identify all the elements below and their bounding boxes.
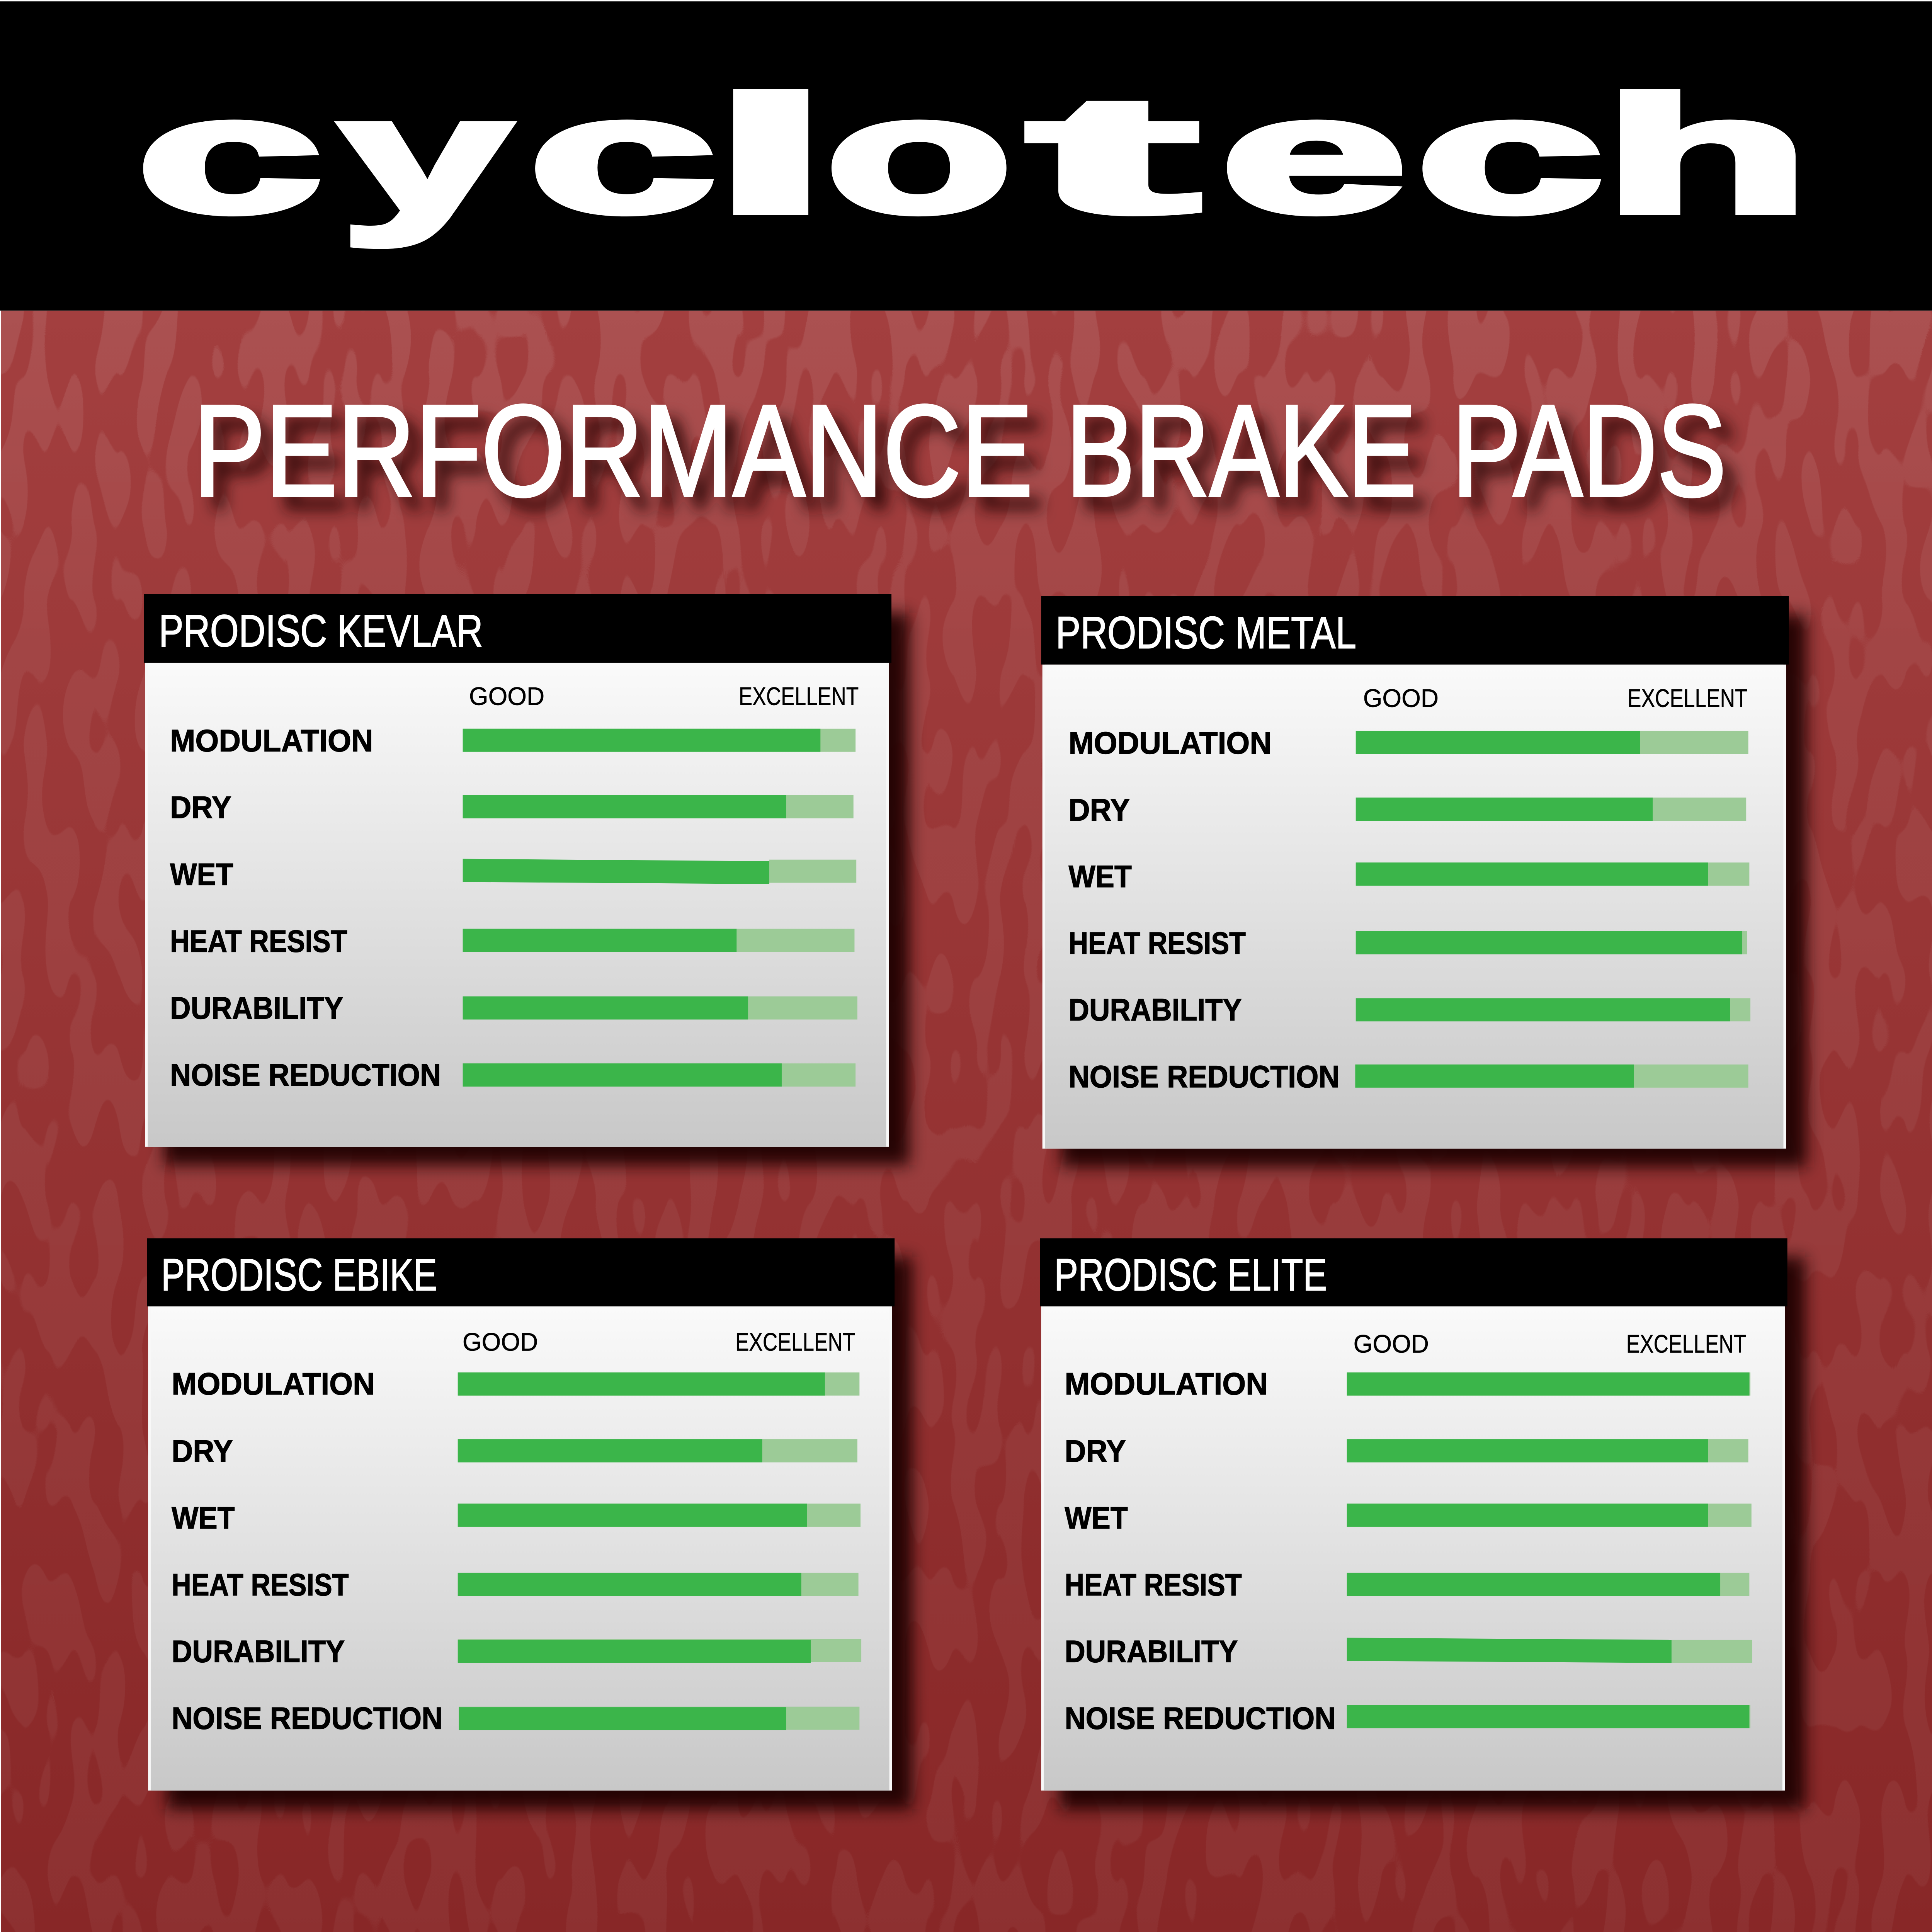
logo: cyclotech: h [1604,63,1810,247]
row: noise reduction: NOISE REDUCTION [1068,1059,1340,1094]
row: noise reduction: NOISE REDUCTION [170,1057,441,1092]
row: modulation [172,1366,859,1401]
row: noise reduction [1068,1059,1748,1094]
black logo band [0,1,1932,311]
card header [1041,596,1789,665]
row: modulation [1065,1366,1750,1401]
row: heat resist: HEAT RESIST [1065,1567,1242,1602]
panel: prodisc kevlar [144,594,909,1165]
row: dry: DRY [170,790,231,825]
row: noise reduction: NOISE REDUCTION [172,1701,442,1736]
main heading: PADS [1452,378,1726,524]
row: wet [170,857,856,892]
logo: cyclotech: y [341,63,512,247]
row: noise reduction [170,1057,855,1092]
row: heat resist: HEAT RESIST [170,923,347,959]
row: dry: DRY [1068,792,1130,827]
card header [144,594,891,663]
card header: PRODISC KEVLAR [159,605,483,656]
scale labels: EXCELLENT [739,682,859,711]
row: noise reduction [172,1701,859,1736]
row: durability: DURABILITY [172,1634,345,1669]
card body [145,663,889,1147]
row: durability [170,990,857,1025]
row: modulation: MODULATION [172,1366,375,1401]
row: modulation [170,723,855,758]
card header: PRODISC METAL [1056,607,1356,658]
scale labels [1363,684,1748,712]
panel: prodisc ebike [147,1238,912,1809]
row: durability: DURABILITY [1068,992,1242,1027]
row: modulation: MODULATION [1068,725,1272,760]
card shadow [1060,1257,1805,1809]
logo: cyclotech: o [826,63,1012,247]
row: heat resist: HEAT RESIST [172,1567,349,1602]
panel: prodisc metal [1041,596,1806,1167]
row: durability [1068,992,1750,1027]
row: modulation: MODULATION [170,723,373,758]
logo: cyclotech: c [529,63,716,246]
scale labels: EXCELLENT [1626,1330,1746,1358]
card header: PRODISC EBIKE [161,1249,437,1300]
scale labels [463,1327,855,1356]
card header [147,1238,895,1306]
scale labels: EXCELLENT [1628,684,1748,712]
row: heat resist [1065,1567,1749,1602]
card shadow [167,1257,912,1809]
row: dry [172,1434,857,1468]
card body [1043,665,1786,1149]
scale labels [1354,1330,1746,1358]
row: durability: DURABILITY [1065,1634,1238,1669]
row: wet [172,1500,861,1535]
row: heat resist: HEAT RESIST [1068,925,1246,960]
logo: cyclotech: c [1416,63,1603,246]
scale labels: EXCELLENT [735,1327,855,1356]
row: durability: DURABILITY [170,990,343,1025]
logo: cyclotech [137,63,1810,247]
main heading [193,378,1726,524]
panel: prodisc elite [1040,1238,1805,1809]
row: heat resist [1068,925,1747,960]
row: dry [1068,792,1746,827]
row: noise reduction: NOISE REDUCTION [1065,1701,1336,1736]
row: dry [1065,1434,1748,1468]
row: wet: WET [1068,859,1132,894]
row: durability [1065,1634,1752,1669]
row: noise reduction [1065,1701,1750,1736]
card shadow [1061,615,1806,1167]
row: modulation [1068,725,1748,760]
row: heat resist [170,923,854,959]
row: dry: DRY [1065,1434,1126,1468]
scale labels: GOOD [1363,684,1439,712]
scale labels: GOOD [463,1327,538,1356]
row: dry: DRY [172,1434,233,1468]
main heading: PERFORMANCE [193,378,1033,524]
card body [1041,1306,1785,1791]
row: wet: WET [1065,1500,1128,1535]
logo: cyclotech: c [137,63,322,246]
logo: cyclotech: e [1221,63,1406,247]
row: dry [170,790,854,825]
logo: cyclotech: t [1029,63,1198,246]
card header [1040,1238,1787,1306]
row: modulation: MODULATION [1065,1366,1268,1401]
row: wet [1065,1500,1752,1535]
card shadow [164,613,909,1165]
row: wet: WET [172,1500,235,1535]
scale labels [469,682,859,711]
row: heat resist [172,1567,859,1602]
main heading: BRAKE [1066,378,1417,524]
row: wet [1068,859,1749,894]
scale labels: GOOD [469,682,544,711]
logo: cyclotech: l [713,63,830,247]
row: wet: WET [170,857,233,892]
row: durability [172,1634,861,1669]
card body [148,1306,892,1791]
card header: PRODISC ELITE [1054,1249,1327,1300]
scale labels: GOOD [1354,1330,1429,1358]
